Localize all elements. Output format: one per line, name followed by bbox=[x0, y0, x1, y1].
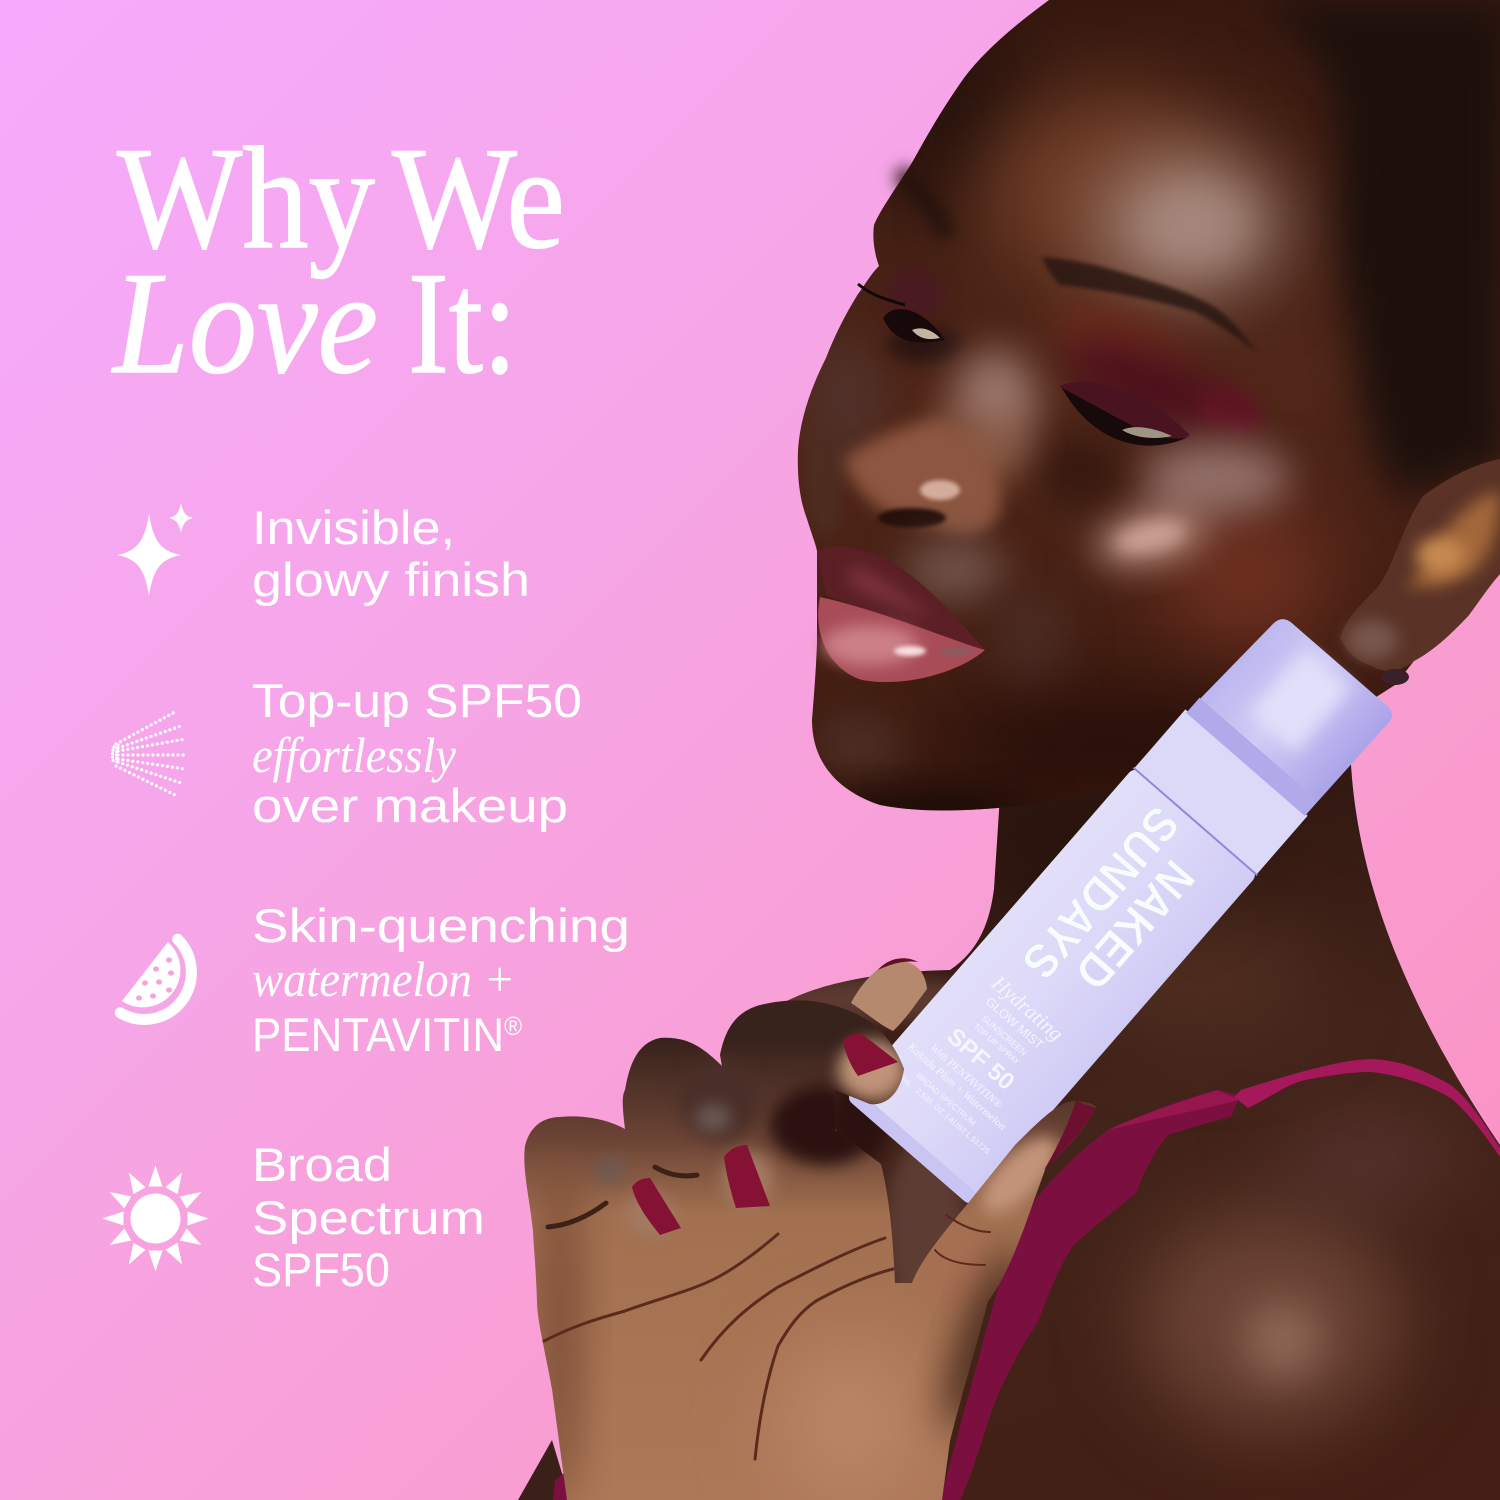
title: Love bbox=[111, 242, 378, 404]
label details bbox=[887, 956, 1085, 1156]
bottle collar bbox=[1134, 709, 1308, 875]
strap detail at bottom edge bbox=[553, 1470, 575, 1500]
ear bbox=[1340, 459, 1500, 685]
text: skin-quenching watermelon + pentavitin: watermelon + bbox=[252, 951, 515, 1007]
translucent cap bbox=[1186, 610, 1396, 817]
text: top-up SPF50 effortlessly over makeup: Top-up SPF50 bbox=[252, 674, 582, 727]
maroon strap bbox=[940, 1059, 1500, 1500]
forearm at bottom edge bbox=[518, 1440, 570, 1500]
collar seam bbox=[1133, 768, 1257, 875]
text: broad spectrum SPF50 bbox=[252, 1138, 485, 1296]
label details: With PENTAVITIN® bbox=[928, 1042, 1005, 1111]
fingernail: ring bbox=[724, 1145, 770, 1208]
upper lip and mouth corner sheen bbox=[905, 540, 1005, 600]
fingernail: middle bbox=[843, 1034, 898, 1076]
palm creases bbox=[544, 1167, 990, 1459]
benefit: top-up SPF50 bbox=[112, 674, 582, 832]
hand bbox=[510, 958, 1110, 1500]
label details: SPF 50 bbox=[941, 1023, 1020, 1096]
forehead shading bbox=[882, 22, 1030, 208]
bottle end shading bbox=[846, 1088, 979, 1206]
text: broad spectrum SPF50: Broad bbox=[252, 1138, 392, 1191]
text: skin-quenching watermelon + pentavitin: ® bbox=[504, 1011, 522, 1041]
lips bbox=[817, 547, 985, 682]
label details: 75mL · 2.53fl. OZ. | AUST L 51725 bbox=[893, 1069, 992, 1156]
label details: SUNSCREEN bbox=[979, 1013, 1029, 1058]
label details: Hydrating bbox=[986, 970, 1068, 1046]
benefit: invisible glowy finish bbox=[117, 501, 530, 606]
nose bbox=[953, 350, 1037, 450]
sunscreen bottle bbox=[846, 607, 1397, 1206]
left temple and cheek bbox=[810, 340, 880, 460]
cheek glow bbox=[1160, 500, 1330, 650]
icon: sun bbox=[102, 1166, 208, 1272]
benefit: broad spectrum SPF50 bbox=[102, 1138, 485, 1296]
text: top-up SPF50 effortlessly over makeup: effortlessly bbox=[252, 727, 457, 783]
photo: model holding the sunscreen bottle bbox=[510, 0, 1500, 1500]
text: top-up SPF50 effortlessly over makeup bbox=[252, 674, 582, 832]
text: skin-quenching watermelon + pentavitin: PENTAVITIN bbox=[252, 1008, 522, 1061]
text: broad spectrum SPF50: Spectrum bbox=[252, 1191, 485, 1244]
neck and shoulders bbox=[740, 740, 1500, 1500]
title: Why bbox=[117, 117, 375, 279]
hair fuzz below ear bbox=[1381, 669, 1409, 685]
hair bbox=[1262, 0, 1500, 500]
bottle body bbox=[846, 766, 1259, 1206]
eyeshadow bbox=[1050, 305, 1180, 360]
fingernail: index bbox=[878, 958, 918, 970]
index fingertip bbox=[851, 960, 927, 1031]
text: skin-quenching watermelon + pentavitin: Skin-quenching bbox=[252, 899, 630, 952]
text: invisible glowy finish: Invisible, bbox=[252, 501, 455, 554]
shadow under middle finger bbox=[770, 1085, 880, 1165]
label details: GLOW MIST bbox=[983, 995, 1046, 1052]
benefit: watermelon and pentavitin bbox=[120, 899, 630, 1061]
brand wordmark: SUNDAYS bbox=[1011, 796, 1189, 989]
label details: BROAD SPECTRUM bbox=[914, 1071, 978, 1128]
cap base band bbox=[1186, 698, 1318, 816]
label details: Kakadu Plum + Watermelon bbox=[904, 1040, 1008, 1133]
fingertips bbox=[722, 1152, 774, 1208]
icon: watermelon slice bbox=[120, 939, 191, 1019]
title: It: bbox=[408, 242, 517, 404]
icon: spray mist bbox=[112, 712, 187, 795]
text: broad spectrum SPF50: SPF50 bbox=[252, 1243, 390, 1296]
title: We bbox=[392, 117, 565, 279]
text: invisible glowy finish: glowy finish bbox=[252, 553, 530, 606]
fingernail: thumb bbox=[1044, 1101, 1096, 1170]
text: skin-quenching watermelon + pentavitin bbox=[252, 899, 630, 1061]
brand wordmark: NAKED bbox=[1064, 850, 1204, 999]
palm and thumb tones bbox=[976, 1127, 1062, 1219]
title bbox=[111, 117, 565, 404]
head and face bbox=[780, 0, 1500, 830]
cap highlight bbox=[1249, 649, 1351, 753]
text: top-up SPF50 effortlessly over makeup: over makeup bbox=[252, 779, 568, 832]
eyes and brows bbox=[858, 172, 1257, 446]
fingernail: little bbox=[632, 1178, 681, 1235]
label details: TOP UP SPRAY bbox=[972, 1022, 1022, 1067]
chin and jaw shadow bbox=[815, 715, 905, 775]
text: invisible glowy finish bbox=[252, 501, 530, 606]
icon: sparkles bbox=[117, 503, 193, 596]
